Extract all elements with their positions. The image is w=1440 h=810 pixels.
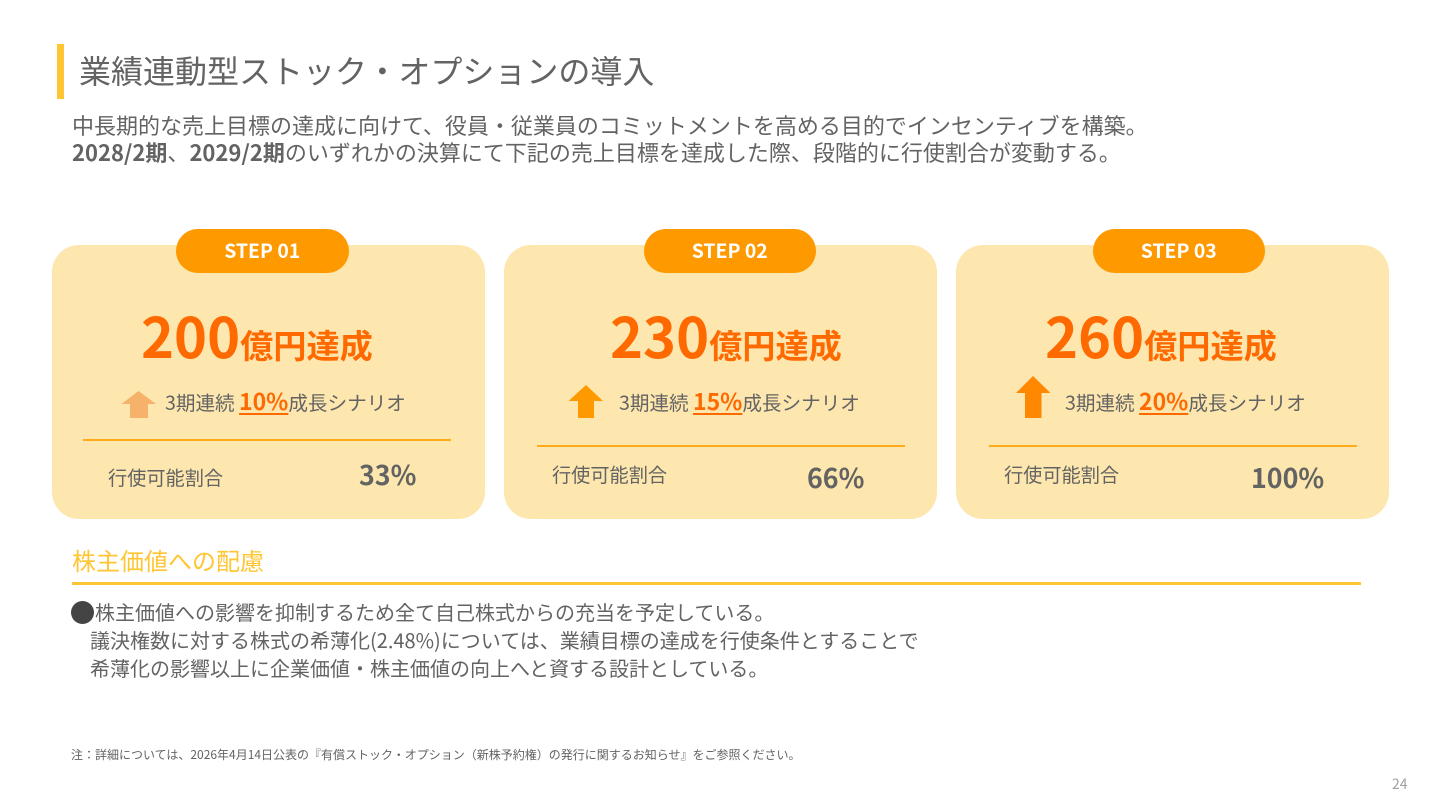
body text bbox=[90, 597, 919, 682]
step 02 badge bbox=[644, 229, 816, 273]
step 03 exercise label: 行使可能割合 bbox=[1004, 460, 1119, 488]
body text: 株主価値への影響を抑制するため全て自己株式からの充当を予定している。 bbox=[95, 597, 774, 626]
step 03 badge: STEP 03 bbox=[1141, 235, 1217, 264]
step 01 divider bbox=[83, 439, 451, 441]
step 03 exercise percent: 100% bbox=[1251, 457, 1324, 496]
step 01 badge: STEP 01 bbox=[224, 235, 300, 264]
step 02 exercise label: 行使可能割合 bbox=[552, 460, 667, 488]
step 01 exercise percent: 33% bbox=[359, 454, 416, 493]
page number: 24 bbox=[1392, 774, 1408, 794]
panel: step 02 bbox=[504, 229, 937, 519]
title: 業績連動型ストック・オプションの導入 bbox=[79, 47, 654, 93]
step 01 badge bbox=[176, 229, 348, 273]
icon: medium up arrow bbox=[568, 385, 603, 418]
icon: large up arrow bbox=[1016, 376, 1050, 418]
panel: step 03 bbox=[956, 229, 1389, 519]
step 02 divider bbox=[536, 445, 904, 447]
body text: 議決権数に対する株式の希薄化(2.48%)については、業績目標の達成を行使条件とすることで bbox=[90, 625, 919, 654]
panel: step 01 bbox=[52, 229, 485, 519]
card background 1 bbox=[52, 245, 485, 519]
footnote: 注：詳細については、2026年4月14日公表の『有償ストック・オプション（新株予約権）の発行に関するお知らせ』をご参照ください。 bbox=[71, 746, 801, 763]
card background 2 bbox=[504, 245, 937, 519]
intro text: 2028/2期、2029/2期のいずれかの決算にて下記の売上目標を達成した際、段階的に行使割合が変動する。 bbox=[72, 136, 1121, 168]
step 01 target: 200億円達成 bbox=[141, 294, 373, 375]
intro text: 中長期的な売上目標の達成に向けて、役員・従業員のコミットメントを高める目的でインセンティブを構築。 bbox=[72, 109, 1148, 141]
bullet bbox=[71, 601, 94, 624]
step 01 growth scenario: 3期連続 10%成長シナリオ bbox=[165, 383, 406, 417]
card background 3 bbox=[956, 245, 1389, 519]
step 03 divider bbox=[988, 445, 1356, 447]
step 01 exercise label: 行使可能割合 bbox=[108, 463, 223, 491]
step 02 badge: STEP 02 bbox=[692, 235, 768, 264]
intro text bbox=[72, 109, 1148, 168]
step 03 growth scenario: 3期連続 20%成長シナリオ bbox=[1065, 383, 1306, 417]
body text: 希薄化の影響以上に企業価値・株主価値の向上へと資する設計としている。 bbox=[90, 653, 768, 682]
step 02 exercise percent: 66% bbox=[807, 457, 864, 496]
step 02 target: 230億円達成 bbox=[610, 294, 842, 375]
step 03 badge bbox=[1092, 229, 1265, 273]
section heading: 株主価値への配慮 bbox=[72, 542, 264, 577]
title accent bar bbox=[57, 44, 64, 99]
step 03 target: 260億円達成 bbox=[1045, 294, 1277, 375]
icon: small up arrow bbox=[122, 391, 156, 418]
section rule bbox=[72, 582, 1361, 585]
step 02 growth scenario: 3期連続 15%成長シナリオ bbox=[619, 383, 860, 417]
